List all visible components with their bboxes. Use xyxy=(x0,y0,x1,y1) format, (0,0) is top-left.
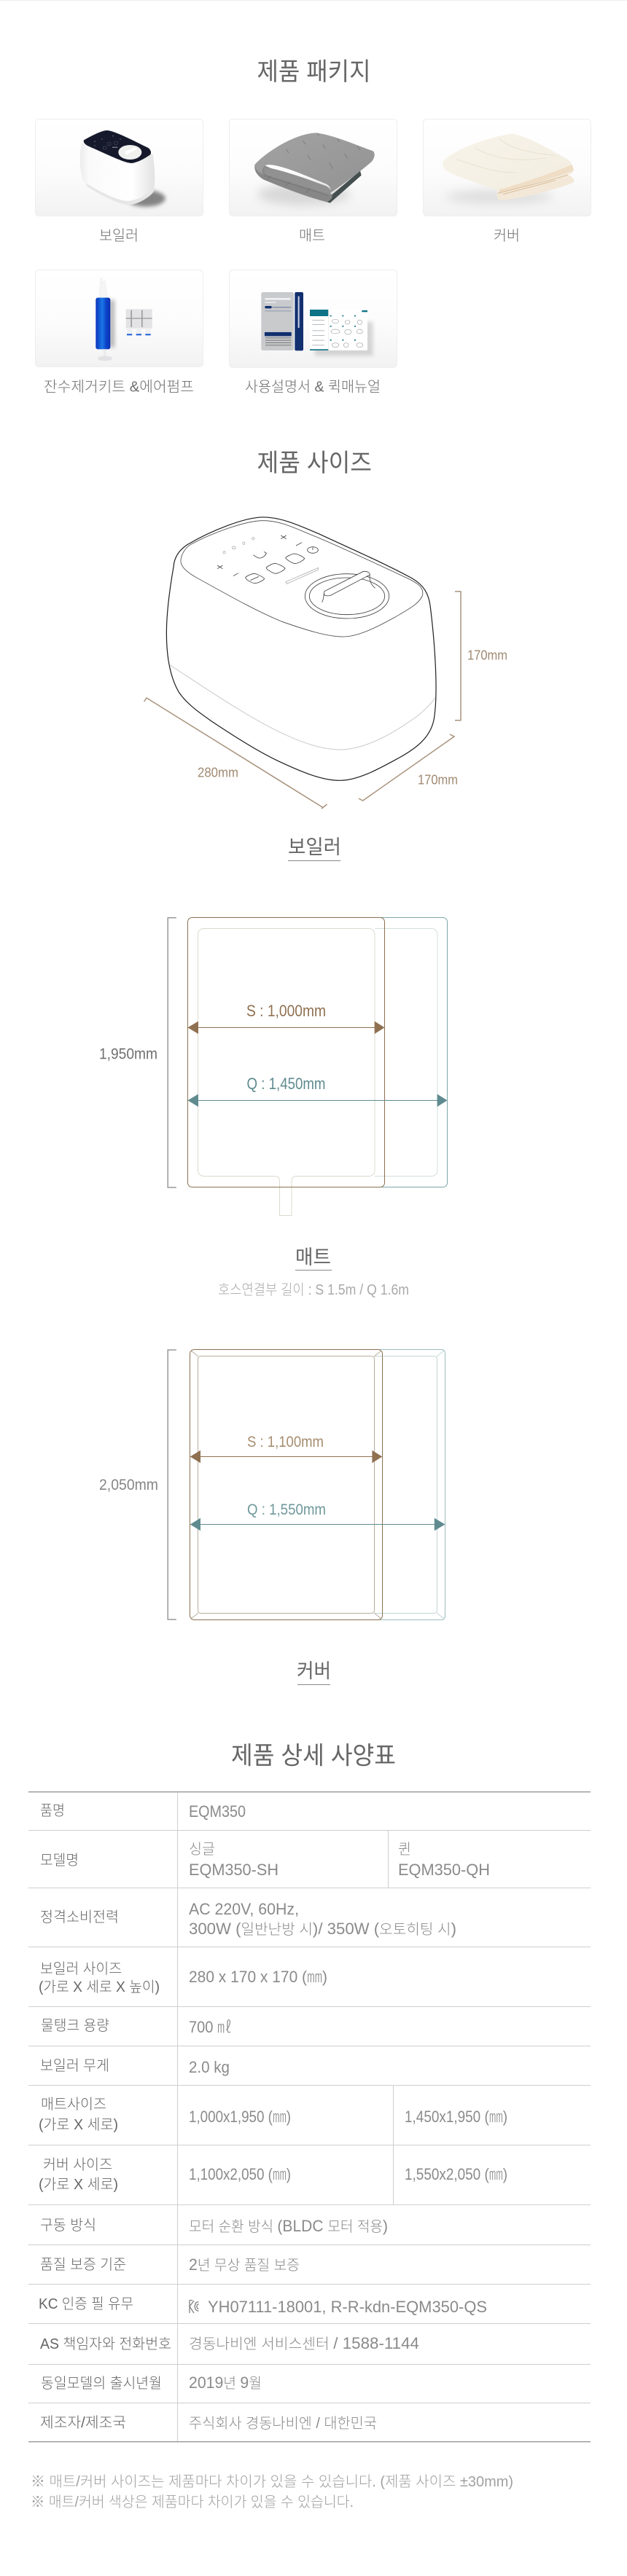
row: warranty xyxy=(40,2255,300,2274)
row: mat size: 1,000x1,950 (㎜) xyxy=(189,2108,291,2126)
row: warranty: 2년 무상 품질 보증 xyxy=(189,2255,300,2274)
footnotes: ※ 매트/커버 사이즈는 제품마다 차이가 있을 수 있습니다. (제품 사이즈 ±30mm) xyxy=(31,2473,513,2490)
label: width 280mm: 280mm xyxy=(198,765,238,780)
table: specification xyxy=(28,1791,591,2442)
dimension: boiler depth xyxy=(359,734,454,801)
icon: air pump and filters photo xyxy=(96,278,152,361)
dimension: boiler width xyxy=(144,698,327,809)
queen cover inner outline xyxy=(375,1351,444,1619)
row: boiler weight: 2.0 kg xyxy=(189,2058,230,2076)
label: cover length: 2,050mm xyxy=(99,1477,158,1493)
row: model name: 퀸 xyxy=(398,1841,411,1858)
row: rated power: 정격소비전력 xyxy=(40,1909,119,1925)
single mat outline xyxy=(188,918,385,1187)
diagram: cover size xyxy=(168,1349,445,1620)
row: KC certification: YH07111-18001, R-R-kdn-EQM350-QS xyxy=(208,2298,487,2316)
row: release date xyxy=(41,2373,262,2392)
row: manufacturer xyxy=(40,2414,377,2432)
diagram: boiler control panel and dial xyxy=(217,535,389,619)
queen inner outline xyxy=(375,928,437,1176)
row: product name: EQM350 xyxy=(189,1802,246,1821)
row: manufacturer: 주식회사 경동나비엔 / 대한민국 xyxy=(189,2415,377,2432)
label: queen cover width: Q : 1,550mm xyxy=(247,1501,326,1518)
label: depth 170mm: 170mm xyxy=(418,772,458,787)
note: hose length: 호스연결부 길이 : S 1.5m / Q 1.6m xyxy=(218,1281,409,1298)
title: product size: 제품 사이즈 xyxy=(257,449,372,477)
row: drive method xyxy=(40,2217,388,2235)
label: height 170mm: 170mm xyxy=(467,648,507,663)
row: boiler size: 280 x 170 x 170 (㎜) xyxy=(189,1968,327,1986)
row: product name xyxy=(40,1802,246,1821)
row: rated power xyxy=(40,1900,456,1938)
row: water tank capacity: 물탱크 용량 xyxy=(41,2017,109,2034)
title: product package: 제품 패키지 xyxy=(257,58,370,86)
label: queen mat width: Q : 1,450mm xyxy=(246,1075,325,1093)
heading: mat: 매트 xyxy=(295,1246,331,1268)
panel: manuals card xyxy=(229,270,397,367)
label: cover: 커버 xyxy=(494,227,520,244)
row: model name: EQM350-QH xyxy=(398,1861,490,1879)
row: mat size: 1,450x1,950 (㎜) xyxy=(405,2108,507,2126)
row: drive method: 구동 방식 xyxy=(40,2217,96,2234)
label: mat length: 1,950mm xyxy=(99,1046,157,1062)
arrow: single width xyxy=(188,1021,385,1034)
single inner outline with hose xyxy=(198,928,375,1215)
row: manufacturer: 제조자/제조국 xyxy=(40,2414,126,2431)
row: cover size: 커버 사이즈 xyxy=(43,2156,112,2173)
row: cover size xyxy=(39,2156,507,2193)
height bracket xyxy=(168,918,176,1187)
height bracket xyxy=(168,1350,176,1619)
single cover outline xyxy=(190,1349,382,1620)
row: rated power: AC 220V, 60Hz, xyxy=(189,1900,299,1918)
panel: boiler card xyxy=(35,119,203,216)
single cover inner outline xyxy=(191,1351,381,1619)
row: AS contact: AS 책임자와 전화번호 xyxy=(40,2336,171,2352)
row: cover size: (가로 X 세로) xyxy=(39,2176,118,2193)
row: boiler size xyxy=(39,1960,327,1995)
row: KC certification: KC 인증 필 유무 xyxy=(39,2296,133,2312)
heading: cover: 커버 xyxy=(297,1660,331,1682)
row: KC certification xyxy=(39,2296,487,2316)
row: cover size: 1,100x2,050 (㎜) xyxy=(189,2165,291,2183)
arrow: queen cover width xyxy=(190,1518,445,1531)
arrow: single cover width xyxy=(190,1450,382,1463)
row: mat size: (가로 X 세로) xyxy=(39,2116,118,2133)
row: drive method: 모터 순환 방식 (BLDC 모터 적용) xyxy=(189,2217,388,2235)
icon: folded cover photo xyxy=(443,133,574,204)
footnotes: ※ 매트/커버 색상은 제품마다 차이가 있을 수 있습니다. xyxy=(31,2494,354,2510)
icon: boiler photo xyxy=(80,130,165,207)
row: AS contact xyxy=(40,2334,419,2352)
label: user manual and quick manual: 사용설명서 & 퀵매뉴얼 xyxy=(245,379,381,395)
row: warranty: 품질 보증 기준 xyxy=(40,2256,126,2273)
row: mat size xyxy=(39,2096,507,2133)
heading: boiler: 보일러 xyxy=(288,836,341,858)
row: product name: 품명 xyxy=(40,1802,65,1819)
row: model name: 모델명 xyxy=(40,1852,79,1869)
row: boiler weight xyxy=(40,2057,230,2076)
queen cover outline xyxy=(378,1349,445,1620)
row: model name: 싱글 xyxy=(189,1841,215,1858)
diagram: boiler line drawing xyxy=(166,517,436,780)
row: boiler weight: 보일러 무게 xyxy=(40,2057,109,2074)
label: boiler: 보일러 xyxy=(99,227,139,244)
row: boiler size: 보일러 사이즈 xyxy=(40,1960,122,1977)
label: single cover width: S : 1,100mm xyxy=(247,1434,324,1450)
diagram: mat size xyxy=(168,918,447,1215)
row: cover size: 1,550x2,050 (㎜) xyxy=(405,2165,507,2183)
row: release date: 2019년 9월 xyxy=(189,2373,262,2392)
panel: cover card xyxy=(423,119,591,216)
row: mat size: 매트사이즈 xyxy=(41,2096,106,2113)
footnotes xyxy=(31,2473,513,2510)
title: detailed specification: 제품 상세 사양표 xyxy=(231,1743,396,1770)
row: model name xyxy=(40,1841,490,1879)
label: single mat width: S : 1,000mm xyxy=(246,1002,326,1020)
panel: mat card xyxy=(229,119,397,216)
row: model name: EQM350-SH xyxy=(189,1861,279,1879)
row: rated power: 300W (일반난방 시)/ 350W (오토히팅 시) xyxy=(189,1920,456,1938)
row: AS contact: 경동나비엔 서비스센터 / 1588-1144 xyxy=(189,2334,419,2352)
icon: KC mark xyxy=(190,2301,198,2313)
label: drain kit and air pump: 잔수제거키트 &에어펌프 xyxy=(44,379,194,395)
row: water tank capacity xyxy=(41,2017,232,2036)
icon: user manual and quick manual photo xyxy=(261,292,373,356)
queen mat outline xyxy=(375,918,448,1187)
panel: drain kit and air pump card xyxy=(35,270,203,367)
row: release date: 동일모델의 출시년월 xyxy=(41,2375,162,2392)
icon: folded mat photo xyxy=(254,133,375,205)
row: water tank capacity: 700 ㎖ xyxy=(189,2018,232,2036)
table rules xyxy=(28,1791,591,2442)
arrow: queen width xyxy=(188,1094,448,1107)
label: mat: 매트 xyxy=(299,227,325,244)
row: boiler size: (가로 X 세로 X 높이) xyxy=(39,1979,160,1995)
dimension: boiler height xyxy=(455,592,461,720)
